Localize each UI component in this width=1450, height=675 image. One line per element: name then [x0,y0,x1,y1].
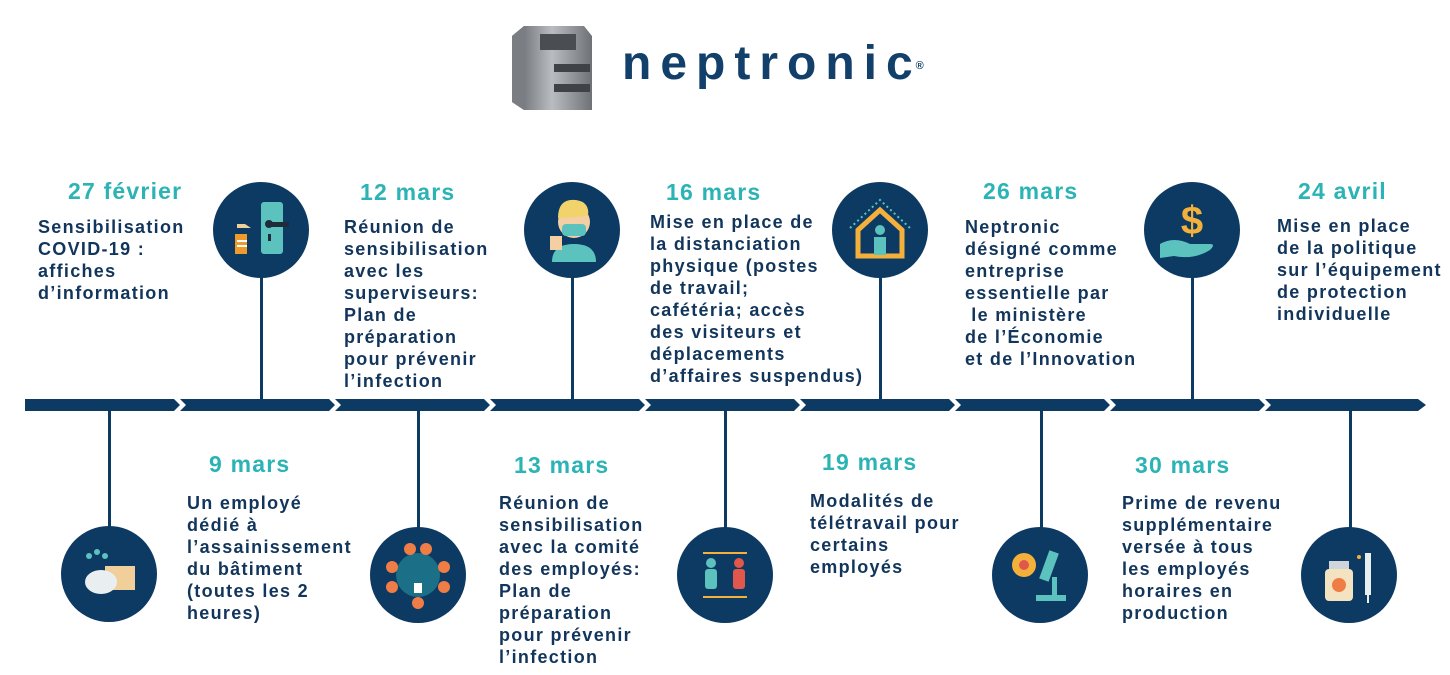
event: 24 avril: individuelle [1277,304,1392,324]
event: 16 mars: d’affaires suspendus) [650,366,863,386]
event: 12 mars: superviseurs: [344,283,479,303]
event: 13 mars: préparation [499,603,612,623]
event: 24 avril [1277,178,1442,324]
event: 12 mars: l’infection [344,371,443,391]
icon: masked worker [524,182,620,278]
event: 13 mars: Réunion de [499,493,610,513]
event: 9 mars: Un employé [187,493,302,513]
event: 26 mars: Neptronic [965,217,1061,237]
event: 24 avril: 24 avril [1298,178,1387,204]
event: 9 mars: (toutes les 2 [187,581,309,601]
event: 19 mars: Modalités de [810,491,935,511]
event: 12 mars: sensibilisation [344,239,489,259]
event: 26 mars: entreprise [965,261,1065,281]
event: 16 mars: de travail; [650,278,749,298]
event: 19 mars: employés [810,557,903,577]
event: 27 février: 27 février [68,178,182,204]
event: 16 mars: cafétéria; accès [650,300,806,320]
icon: meeting table [370,527,466,623]
event: 30 mars [1122,452,1282,623]
event: 24 avril: Mise en place [1277,216,1411,236]
event: 27 février: Sensibilisation [38,217,185,237]
icon: handwashing [61,526,157,622]
event: 30 mars: Prime de revenu [1122,493,1282,513]
icon: hand with dollar [1144,182,1240,278]
icon: house distancing [832,182,928,278]
event: 13 mars: sensibilisation [499,515,644,535]
event: 30 mars: production [1122,603,1229,623]
event: 12 mars: préparation [344,327,457,347]
event: 9 mars: 9 mars [209,451,290,477]
event: 13 mars: 13 mars [514,452,609,478]
event: 13 mars: l’infection [499,647,598,667]
event: 13 mars: des employés: [499,559,641,579]
event: 24 avril: de protection [1277,282,1408,302]
event: 26 mars: désigné comme [965,239,1118,259]
event: 16 mars [650,179,863,386]
event: 12 mars: Plan de [344,305,417,325]
icon: vaccine [1301,527,1397,623]
icon: hand with dollar: $ [1181,199,1203,243]
event: 16 mars: 16 mars [666,179,761,205]
event: 19 mars: télétravail pour [810,513,960,533]
logo [512,26,924,110]
event: 9 mars: du bâtiment [187,559,303,579]
event: 16 mars: déplacements [650,344,786,364]
event: 26 mars: essentielle par [965,283,1110,303]
event: 13 mars: pour prévenir [499,625,632,645]
event: 26 mars [965,178,1136,369]
event: 19 mars [810,449,960,577]
logo mark [512,26,592,110]
event: 16 mars: des visiteurs et [650,322,802,342]
event: 27 février: d’information [38,283,170,303]
event: 24 avril: de la politique [1277,238,1418,258]
timeline bar [25,399,1426,411]
event: 26 mars: 26 mars [983,178,1078,204]
event: 27 février: COVID-19 : [38,239,145,259]
event: 27 février: affiches [38,261,116,281]
event: 16 mars: physique (postes [650,256,819,276]
icon: spray and door [213,182,309,278]
event: 30 mars: horaires en [1122,581,1233,601]
event: 9 mars: l’assainissement [187,537,352,557]
event: 9 mars [187,451,352,623]
event: 13 mars: Plan de [499,581,572,601]
event: 9 mars: dédié à [187,515,258,535]
event: 12 mars: Réunion de [344,217,455,237]
event: 12 mars: pour prévenir [344,349,477,369]
logo wordmark: neptronic® [622,37,924,90]
icon: microscope [992,527,1088,623]
event: 30 mars: supplémentaire [1122,515,1273,535]
event: 19 mars: certains [810,535,889,555]
connectors [260,270,263,400]
icon: telework people [677,527,773,623]
event: 26 mars: et de l’Innovation [965,349,1136,369]
event: 13 mars: avec la comité [499,537,640,557]
event: 12 mars [344,179,489,391]
event: 26 mars: de l’Économie [965,327,1104,347]
event: 16 mars: Mise en place de [650,212,814,232]
event: 26 mars: le ministère [971,305,1087,325]
event: 19 mars: 19 mars [822,449,917,475]
event: 30 mars: versée à tous [1122,537,1254,557]
event: 9 mars: heures) [187,603,261,623]
event: 30 mars: les employés [1122,559,1251,579]
event: 13 mars [499,452,644,667]
event: 30 mars: 30 mars [1135,452,1230,478]
event: 12 mars: avec les [344,261,424,281]
event: 24 avril: sur l’équipement [1277,260,1442,280]
event: 16 mars: la distanciation [650,234,802,254]
event: 27 février [38,178,185,303]
event: 12 mars: 12 mars [360,179,455,205]
